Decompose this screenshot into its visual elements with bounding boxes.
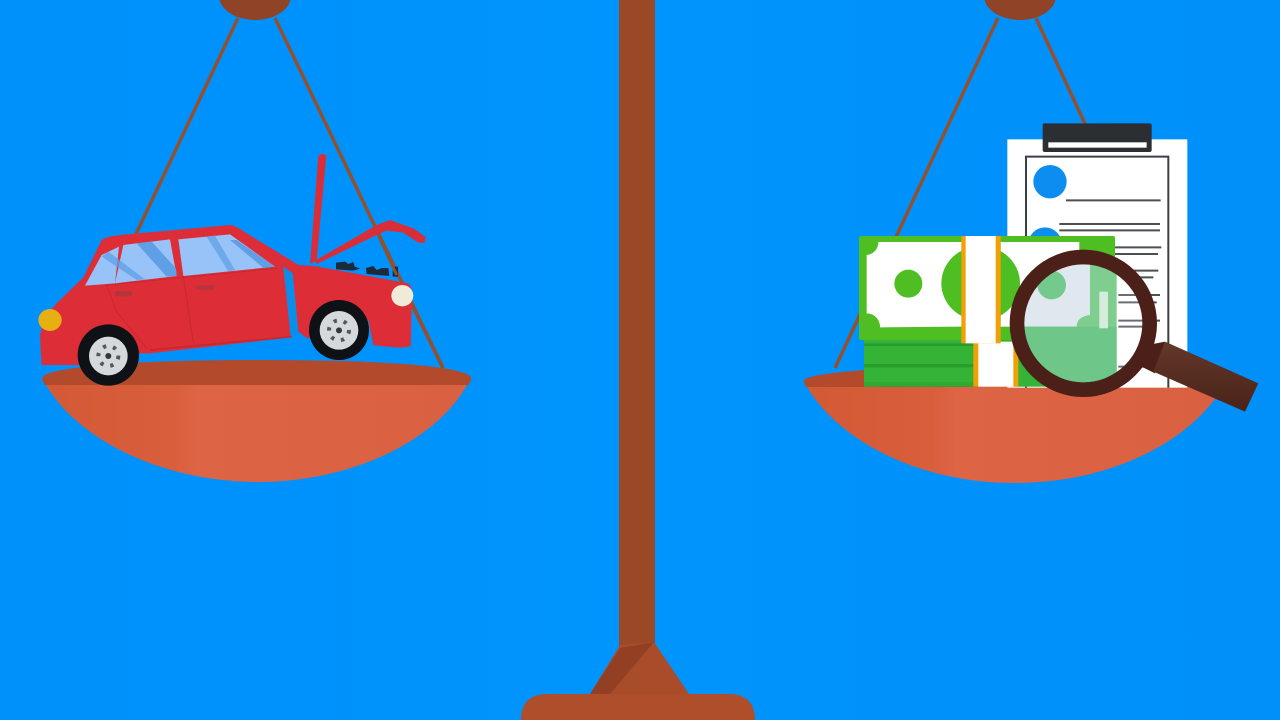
door lines and handles	[107, 268, 292, 350]
handle	[1153, 342, 1258, 412]
money, clipboard and magnifying glass	[859, 123, 1258, 412]
headlight	[391, 285, 413, 306]
stacked lower bills	[864, 340, 1051, 387]
rear wheel	[78, 324, 139, 386]
scale stand	[521, 0, 755, 720]
glass ring	[1017, 257, 1150, 390]
base triangle	[590, 642, 689, 694]
right strings	[835, 18, 1086, 368]
engine parts	[336, 262, 398, 277]
lens	[1024, 264, 1142, 382]
right knob	[984, 0, 1056, 20]
left strings	[136, 18, 443, 368]
left hanger	[136, 0, 443, 368]
red car with open hood	[38, 154, 443, 386]
raised hood panels	[310, 154, 425, 264]
text lines	[1059, 200, 1161, 367]
clip	[1043, 123, 1152, 152]
left white face	[867, 242, 962, 327]
windows	[85, 234, 275, 286]
right pan rim	[804, 366, 1226, 388]
front wheel	[309, 300, 369, 360]
clipboard	[1007, 123, 1187, 388]
left pan	[42, 360, 471, 482]
string passing over the hood	[378, 235, 443, 368]
right white face	[1001, 242, 1079, 327]
pole	[619, 0, 655, 650]
door gap	[283, 267, 298, 337]
right hanger	[835, 0, 1086, 368]
handle neck	[1142, 342, 1165, 373]
top bill	[859, 236, 1115, 343]
left bill seal	[894, 270, 922, 298]
central portrait oval	[941, 246, 1020, 321]
car front body	[283, 256, 412, 347]
blue bullets	[1033, 165, 1067, 198]
magnifying glass	[1017, 257, 1258, 412]
left pan rim	[42, 360, 471, 386]
tail light	[38, 309, 62, 331]
right pan	[804, 366, 1226, 483]
upper paper band	[961, 236, 1001, 343]
right pan bowl	[807, 387, 1223, 483]
left pan bowl	[46, 385, 467, 482]
car cabin and rear body	[40, 225, 292, 365]
base plate	[521, 694, 755, 720]
lower paper band	[973, 342, 1018, 387]
left knob	[219, 0, 291, 20]
